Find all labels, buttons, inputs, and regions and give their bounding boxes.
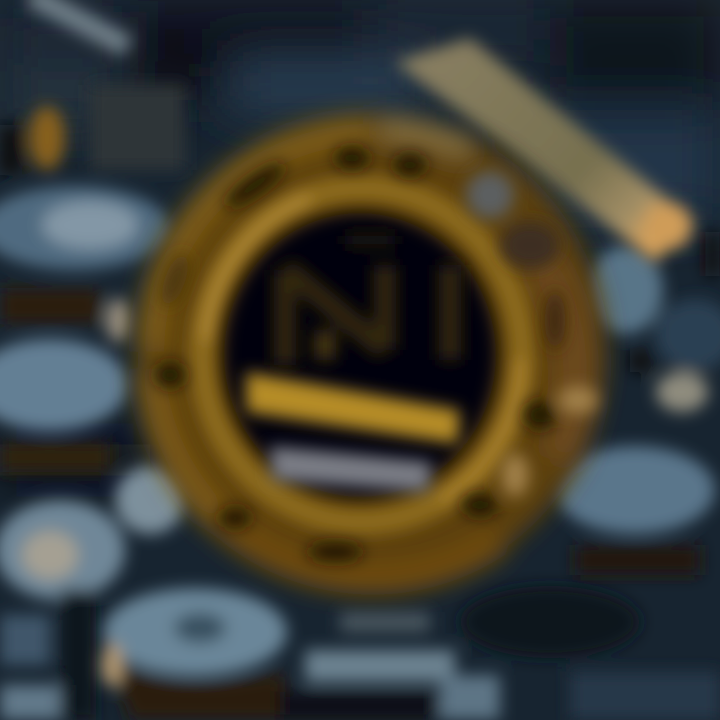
coin outer rim	[138, 114, 606, 590]
coin inner bright ring	[202, 188, 522, 522]
emblem silver text band	[270, 446, 432, 492]
emblem letter M	[285, 240, 450, 365]
silver coins: right stack	[555, 232, 720, 575]
coin dark centre	[224, 213, 496, 497]
gold coin	[138, 114, 606, 590]
silver coins: bottom pile	[101, 586, 720, 720]
emblem gold bar	[246, 372, 460, 444]
rim notches	[155, 147, 598, 561]
silver coins: left stack	[0, 0, 185, 720]
background: dark and blue tones	[0, 0, 720, 480]
tan stick	[395, 38, 695, 262]
